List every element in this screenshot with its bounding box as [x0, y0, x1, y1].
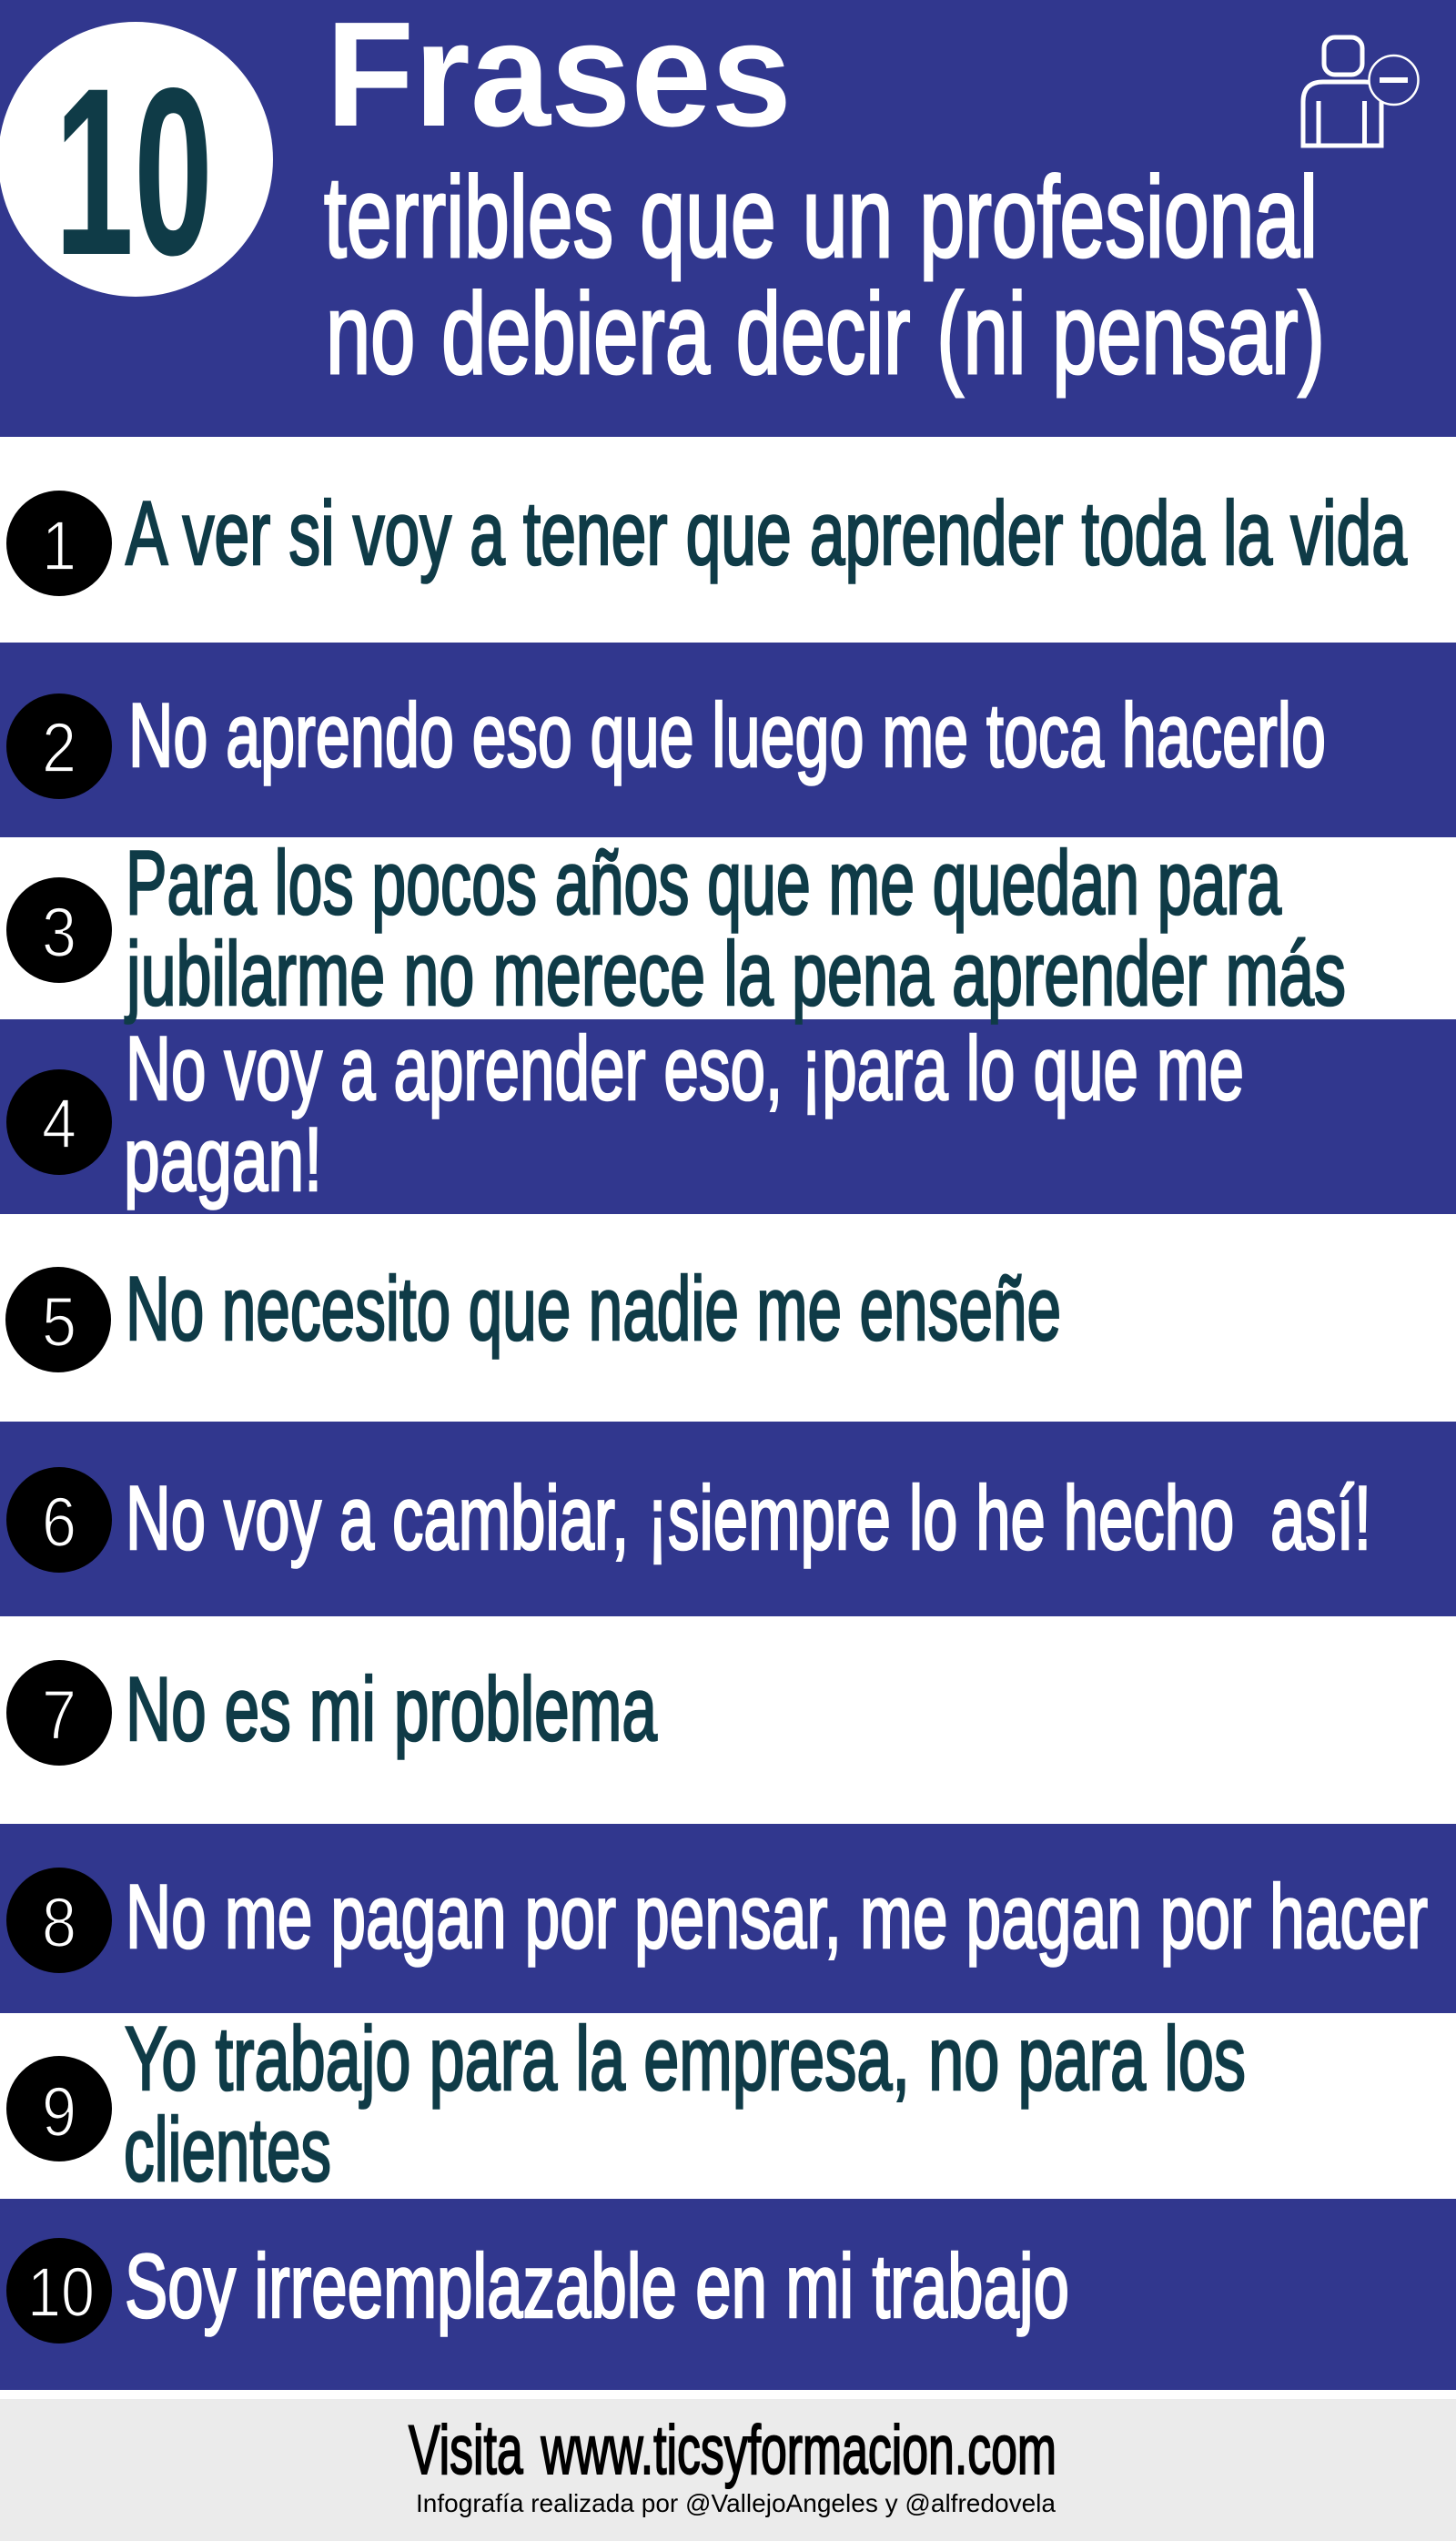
- panel: phrase 8: [0, 1824, 1456, 2013]
- number badge 7: [6, 1660, 112, 1766]
- number badge 3: [6, 877, 112, 983]
- number badge 2: 2: [42, 709, 76, 787]
- number badge 2: [6, 693, 112, 799]
- number badge 10: 10: [27, 2253, 95, 2332]
- panel: phrase 9: [6, 2008, 1246, 2200]
- number badge 9: [6, 2056, 112, 2161]
- number badge 9: 9: [42, 2073, 76, 2151]
- panel: phrase 2: [0, 643, 1456, 837]
- phrase text 10: Soy irreemplazable en mi trabajo: [125, 2235, 1069, 2336]
- panel: phrase 3: [6, 832, 1346, 1024]
- panel: phrase 1: [6, 482, 1408, 596]
- number badge 5: [5, 1267, 111, 1372]
- number badge 1: 1: [42, 507, 76, 585]
- number badge 7: 7: [42, 1676, 76, 1755]
- phrase text 4, line 2: pagan!: [124, 1109, 322, 1210]
- badge: number 10: 10: [55, 38, 213, 305]
- panel: footer: [0, 2399, 1456, 2541]
- panel: phrase 10: [0, 2199, 1456, 2390]
- number badge 1: [6, 491, 112, 596]
- number badge 6: 6: [42, 1483, 76, 1562]
- number badge 3: 3: [42, 894, 76, 972]
- number badge 4: 4: [42, 1085, 76, 1163]
- panel: header: [0, 0, 1456, 437]
- number badge 6: [6, 1467, 112, 1573]
- number badge 8: 8: [42, 1884, 76, 1962]
- number badge 5: 5: [42, 1283, 76, 1362]
- phrase text 7: No es mi problema: [126, 1658, 658, 1759]
- icon: person with minus sign: [1303, 37, 1418, 146]
- footer link text: Visita www.ticsyformacion.com: [409, 2412, 1057, 2489]
- number badge 4: [6, 1069, 112, 1175]
- number badge 8: [6, 1868, 112, 1973]
- panel: phrase 7: [6, 1658, 658, 1766]
- phrase text 9, line 2: clientes: [124, 2099, 331, 2200]
- badge: number 10: [0, 22, 273, 305]
- panel: phrase 4: [0, 1017, 1456, 1214]
- panel: phrase 6: [0, 1422, 1456, 1616]
- number badge 10: [6, 2238, 112, 2344]
- panel: phrase 5: [5, 1258, 1061, 1372]
- footer credits: Infografía realizada por @VallejoAngeles y @alfredovela: [416, 2489, 1056, 2517]
